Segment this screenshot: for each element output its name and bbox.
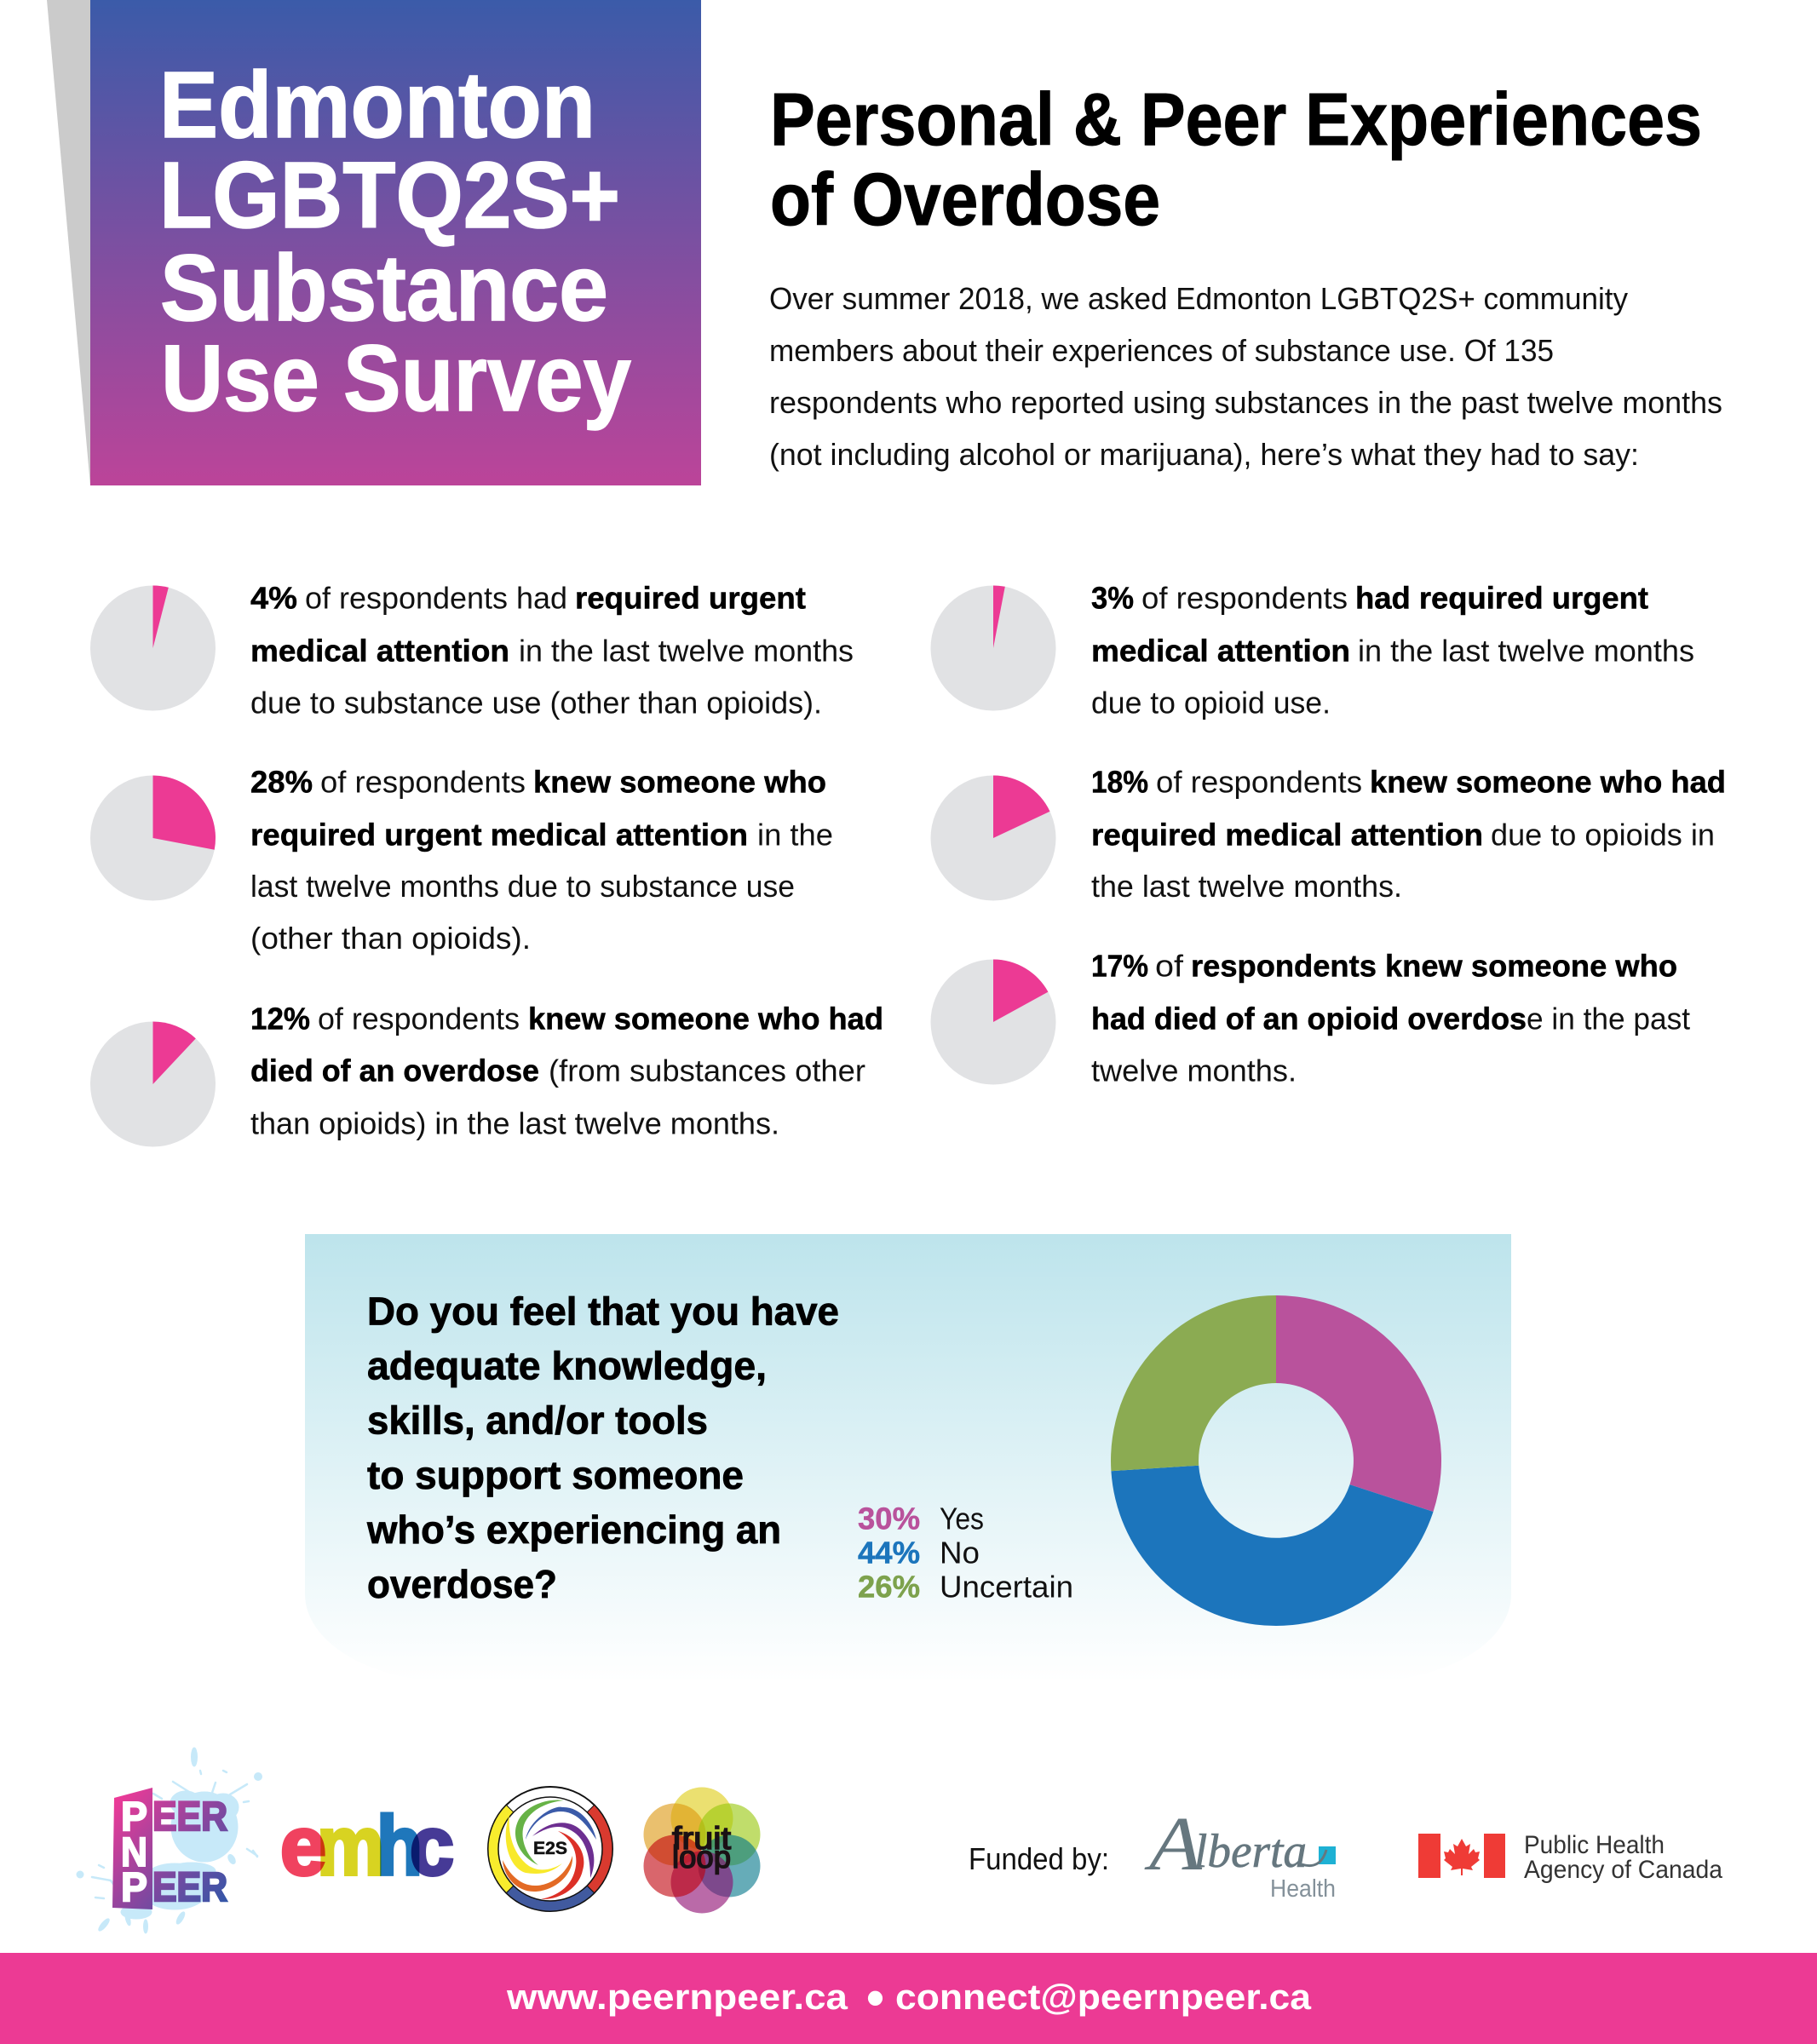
contact links xyxy=(506,1969,1312,2026)
gradient title panel xyxy=(90,0,701,485)
ribbon xyxy=(112,1788,152,1909)
text 12%: knew someone who had xyxy=(528,1002,883,1036)
text 28%: knew someone who xyxy=(533,765,826,799)
text 17%: e in the past xyxy=(1527,1002,1690,1036)
text 3% xyxy=(1091,581,1694,721)
footer bar xyxy=(0,1953,1817,2044)
wordmark: loop xyxy=(672,1840,731,1875)
text 17%: respondents knew someone who xyxy=(1191,949,1677,983)
heading: personal and peer experiences xyxy=(770,78,1702,241)
intro paragraph: respondents who reported using substances in the past twelve months xyxy=(769,385,1722,420)
text 28%: (other than opioids). xyxy=(250,921,531,956)
text 18%: the last twelve months. xyxy=(1091,869,1402,904)
contact links: www.peernpeer.ca xyxy=(506,1977,848,2017)
stat: 18 percent xyxy=(930,765,1726,904)
text 17% xyxy=(1091,949,1690,1088)
text 12%: (from substances other xyxy=(549,1053,865,1088)
text 17%: had died of an opioid overdos xyxy=(1091,1002,1527,1036)
logo wordmark xyxy=(121,1794,227,1910)
donut chart xyxy=(1111,1295,1441,1626)
pie chart 3% xyxy=(930,586,1056,710)
panel background xyxy=(305,1234,1511,1682)
inner circle xyxy=(498,1797,602,1901)
stat: 12 percent xyxy=(90,1002,883,1146)
contact links: connect@peernpeer.ca xyxy=(895,1977,1312,2017)
text 4%: medical attention xyxy=(250,634,509,668)
text 4%: due to substance use (other than opioids). xyxy=(250,685,822,721)
logo: emhc: e xyxy=(280,1799,326,1892)
legend xyxy=(858,1501,1073,1605)
yellow ring segment xyxy=(488,1805,514,1893)
heading: personal and peer experiences: Personal & Peer Experiences xyxy=(770,78,1702,161)
legend: Uncertain xyxy=(940,1569,1073,1605)
text 18%: due to opioids in xyxy=(1491,818,1715,852)
agency name: Public Health xyxy=(1524,1831,1665,1859)
text 4%: of respondents had xyxy=(305,581,567,615)
logo: E2S xyxy=(488,1787,612,1911)
question text: skills, and/or tools xyxy=(367,1398,708,1443)
logo: Public Health Agency of Canada xyxy=(1418,1831,1722,1884)
text 12%: of respondents xyxy=(318,1002,520,1036)
text 17%: twelve months. xyxy=(1091,1053,1297,1088)
text 18%: 18% xyxy=(1091,765,1148,799)
stat: 17 percent xyxy=(930,949,1690,1088)
swirl xyxy=(503,1800,596,1899)
pie chart 4% xyxy=(90,586,216,710)
stat: 28 percent xyxy=(90,765,833,956)
text 28%: last twelve months due to substance use xyxy=(250,869,795,904)
text 12% xyxy=(250,1002,883,1141)
text 18%: knew someone who had xyxy=(1370,765,1726,799)
heading: personal and peer experiences: of Overdose xyxy=(770,158,1160,241)
text 4%: required urgent xyxy=(575,581,806,615)
header panel: survey title xyxy=(47,0,701,485)
text 3%: due to opioid use. xyxy=(1091,685,1331,721)
blue square xyxy=(1319,1846,1336,1864)
logo: emhc: h xyxy=(377,1799,423,1892)
text 4% xyxy=(250,581,854,721)
logo: emhc: c xyxy=(410,1799,454,1892)
text 18%: of respondents xyxy=(1156,765,1362,799)
blue ring segment xyxy=(506,1886,595,1911)
outer ring xyxy=(488,1787,612,1911)
text 28%: in the xyxy=(757,818,833,852)
survey title text xyxy=(159,53,631,431)
survey title text: Use Survey xyxy=(161,326,631,431)
logo: emhc: m xyxy=(317,1799,384,1892)
paint splat xyxy=(77,1748,262,1933)
agency name: Agency of Canada xyxy=(1524,1856,1722,1884)
logo: emhc xyxy=(280,1799,454,1892)
Alberta script: lberta xyxy=(1194,1825,1307,1878)
text 4%: in the last twelve months xyxy=(519,634,854,668)
text 12%: died of an overdose xyxy=(250,1053,539,1088)
label: E2S xyxy=(533,1839,567,1858)
question text xyxy=(366,1289,839,1606)
wordmark: fruit xyxy=(672,1821,732,1856)
logo wordmark: EER xyxy=(152,1794,227,1840)
Alberta script: A xyxy=(1144,1802,1203,1886)
logo wordmark: N xyxy=(121,1830,147,1875)
text 18% xyxy=(1091,765,1726,904)
text 17%: of xyxy=(1155,949,1184,983)
legend: Yes xyxy=(940,1501,984,1536)
pie chart 28% xyxy=(90,775,216,901)
survey title text: Substance xyxy=(160,236,608,341)
text 17%: 17% xyxy=(1091,949,1148,983)
intro paragraph: Over summer 2018, we asked Edmonton LGBTQ2S+ community xyxy=(769,281,1628,316)
question text: adequate knowledge, xyxy=(367,1344,767,1388)
panel: knowledge question xyxy=(305,1234,1511,1682)
survey title text: Edmonton xyxy=(159,53,595,158)
text 3%: in the last twelve months xyxy=(1358,634,1694,668)
question text: who’s experiencing an xyxy=(366,1507,781,1552)
red ring segment xyxy=(587,1805,612,1893)
Alberta script xyxy=(1144,1802,1307,1886)
question text: to support someone xyxy=(367,1453,744,1497)
pie chart 17% xyxy=(930,959,1056,1085)
legend: 44% xyxy=(858,1535,920,1570)
text 28% xyxy=(250,765,833,956)
text 12%: 12% xyxy=(250,1002,310,1036)
text 28%: 28% xyxy=(250,765,313,799)
pie chart 18% xyxy=(930,775,1056,901)
grey shadow wedge xyxy=(47,0,90,485)
text 28%: of respondents xyxy=(320,765,526,799)
logo wordmark: EER xyxy=(152,1865,227,1910)
logo wordmark: P xyxy=(121,1794,147,1840)
text 3%: 3% xyxy=(1091,581,1134,615)
stat: 4 percent xyxy=(90,581,854,721)
swash xyxy=(1302,1850,1326,1866)
logo wordmark: P xyxy=(121,1865,147,1910)
funded by label: Funded by: xyxy=(969,1841,1109,1876)
legend: 26% xyxy=(858,1569,920,1605)
text 28%: required urgent medical attention xyxy=(250,818,748,852)
logo: fruit loop xyxy=(644,1787,760,1913)
text 3%: medical attention xyxy=(1091,634,1350,668)
Health: Health xyxy=(1270,1875,1336,1903)
wordmark xyxy=(672,1821,732,1875)
text 12%: than opioids) in the last twelve months. xyxy=(250,1105,779,1141)
pie chart 12% xyxy=(90,1022,216,1146)
text 3%: had required urgent xyxy=(1355,581,1648,615)
stat: 3 percent xyxy=(930,581,1694,721)
intro paragraph: members about their experiences of substance use. Of 135 xyxy=(769,333,1554,368)
question text: Do you feel that you have xyxy=(367,1289,839,1334)
legend: No xyxy=(940,1535,980,1570)
logo: Peer N Peer xyxy=(77,1748,262,1933)
question text: overdose? xyxy=(367,1562,557,1606)
agency name xyxy=(1524,1831,1722,1884)
survey title text: LGBTQ2S+ xyxy=(159,143,620,248)
overlapping circles xyxy=(644,1787,760,1913)
flag xyxy=(1418,1834,1505,1878)
intro paragraph: (not including alcohol or marijuana), here’s what they had to say: xyxy=(769,437,1639,472)
contact links: • xyxy=(866,1969,884,2026)
text 4%: 4% xyxy=(250,581,297,615)
legend: 30% xyxy=(858,1501,920,1536)
text 18%: required medical attention xyxy=(1091,818,1483,852)
text 3%: of respondents xyxy=(1141,581,1348,615)
logo: Alberta Health xyxy=(1144,1802,1336,1903)
intro paragraph xyxy=(769,281,1722,472)
